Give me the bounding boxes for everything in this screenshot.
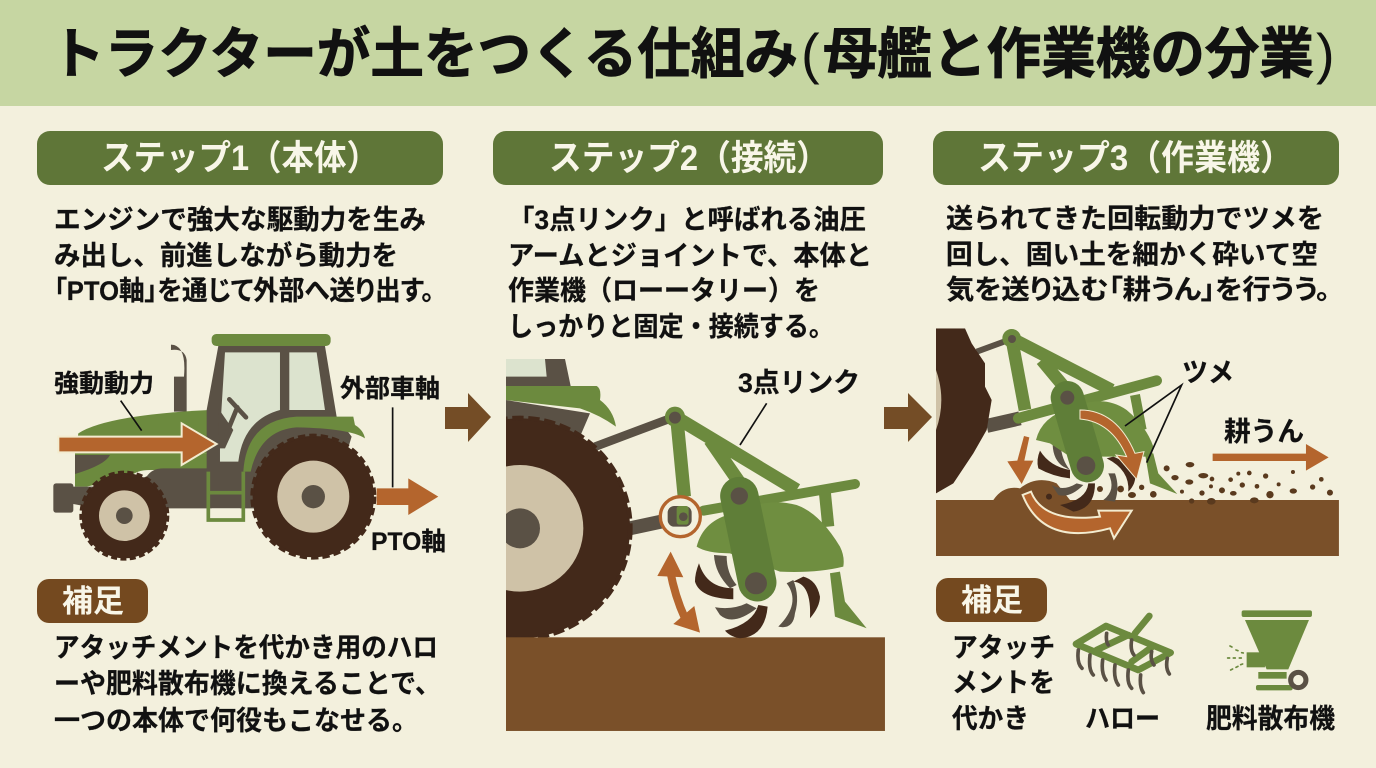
blades [1037, 445, 1135, 512]
soil particles [1097, 462, 1333, 505]
badge: note [936, 578, 1047, 622]
heading: step 3 [933, 131, 1339, 185]
text block: step 1 description [54, 205, 434, 306]
arrow: up and down [657, 552, 700, 633]
title: トラクターが土をつくる仕組み [51, 23, 798, 85]
panel: step 2 [493, 131, 885, 731]
title [51, 22, 1335, 85]
arrow: tilling direction [1213, 444, 1329, 471]
connection point ring [660, 497, 700, 537]
soil [936, 480, 1339, 556]
soil [506, 637, 885, 731]
text block: note: 一つの本体で何役もこなせる。 [54, 706, 418, 736]
text block: step 3 description: 気を送り込む「耕うん」を行うう。 [946, 275, 1330, 305]
heading: step 2: ステップ2（接続） [549, 139, 829, 178]
header band [0, 0, 1376, 106]
badge: note: 補足 [961, 583, 1023, 618]
text block: note: メントを [952, 668, 1055, 698]
arrow: down [1007, 436, 1033, 484]
text block: step 3 description: 回し、固い土を細かく砕いて空 [946, 240, 1318, 270]
text block: step 3 description [946, 204, 1330, 305]
title: ) [1316, 22, 1335, 85]
text block: step 1 description: み出し、前進しながら動力を [54, 240, 398, 271]
label: outer axle: 外部車軸 [340, 375, 440, 403]
heading: step 2 [493, 131, 883, 185]
text block: note [952, 633, 1055, 734]
illustration: tilling [936, 328, 1339, 556]
label: harrow: ハロー [1085, 704, 1160, 734]
label: tilling: 耕うん [1224, 417, 1304, 447]
front wheel [81, 473, 167, 559]
heading: step 3: ステップ3（作業機） [978, 139, 1293, 178]
arrow: drive power [58, 423, 217, 465]
arrow: soil rotation [1023, 492, 1132, 538]
title: ( [801, 22, 820, 85]
label: PTO shaft: PTO軸 [371, 528, 446, 556]
arrow: blade rotation [1080, 410, 1144, 479]
illustration: tractor [53, 334, 438, 559]
heading: step 1: ステップ1（本体） [101, 139, 379, 178]
text block: step 3 description: 送られてきた回転動力でツメを [946, 204, 1324, 234]
arrow: PTO output [377, 478, 438, 515]
blades [695, 555, 820, 638]
heading: step 1 [37, 131, 443, 185]
text block: note: アタッチメントを代かき用のハロ [54, 633, 438, 663]
panel: step 3 [933, 131, 1339, 734]
badge: note [37, 579, 148, 623]
arrow: step 2 to 3 [884, 393, 932, 442]
label: tines: ツメ [1182, 358, 1234, 388]
label: 3-point link: 3点リンク [738, 368, 860, 398]
text block: note: アタッチ [952, 633, 1055, 663]
illustration: three-point link [506, 359, 885, 731]
icon: fertilizer spreader [1228, 610, 1312, 690]
text block: step 1 description: エンジンで強大な駆動力を生み [54, 205, 426, 235]
arrow: step 1 to 2 [445, 393, 491, 442]
rear wheel [252, 436, 374, 558]
text block: step 2 description: 「3点リンク」と呼ばれる油圧 [508, 205, 866, 235]
text block: note [54, 633, 441, 736]
text block: note: 代かき [952, 704, 1029, 734]
text block: step 2 description: アームとジョイントで、本体と [508, 241, 872, 271]
text block: step 2 description: 作業機（ローータリー）を [508, 276, 820, 306]
title: 母艦と作業機の分業 [823, 23, 1314, 85]
text block: step 2 description: しっかりと固定・接続する。 [508, 312, 834, 342]
text block: note: ーや肥料散布機に換えることで、 [54, 669, 441, 699]
text block: step 1 description: 「PTO軸」を通じて外部へ送り出す。 [54, 276, 434, 306]
label: fertilizer spreader: 肥料散布機 [1206, 704, 1335, 734]
label: drive power: 強動動力 [54, 370, 154, 398]
icon: harrow [1076, 616, 1171, 693]
text block: step 2 description [508, 205, 872, 342]
panel: step 1 [37, 131, 446, 736]
badge: note: 補足 [62, 584, 124, 619]
